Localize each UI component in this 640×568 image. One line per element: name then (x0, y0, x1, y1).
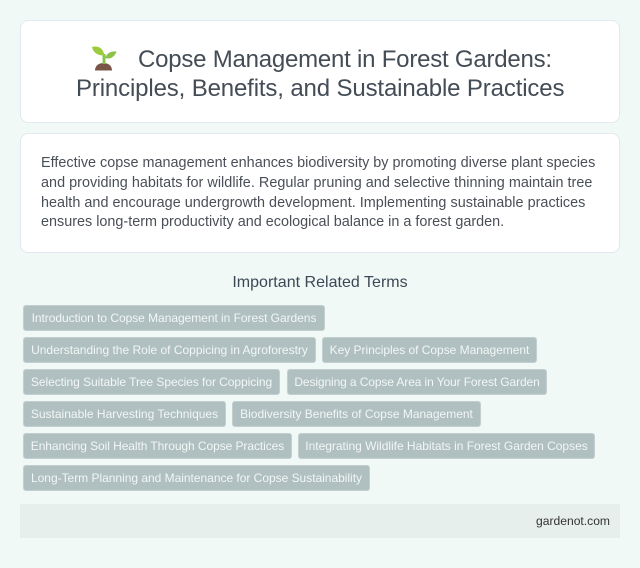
text line 2: and providing habitats for wildlife. Regular pruning and selective thinning maintain tree (41, 175, 592, 191)
tag (23, 305, 325, 331)
tag (287, 369, 547, 395)
tag: Biodiversity Benefits of Copse Management (240, 407, 473, 421)
tag: Selecting Suitable Tree Species for Coppicing (31, 375, 272, 389)
heading: related terms: Important Related Terms (232, 274, 408, 291)
tag (23, 465, 370, 491)
tag: Understanding the Role of Coppicing in Agroforestry (31, 343, 308, 357)
text line 3: health and encourage undergrowth development. Implementing sustainable practices (41, 195, 585, 211)
tag (298, 433, 595, 459)
tag: Long-Term Planning and Maintenance for Copse Sustainability (31, 471, 362, 485)
tag: Integrating Wildlife Habitats in Forest Garden Copses (305, 439, 588, 453)
icon: seedling (92, 46, 116, 70)
title line 1: Copse Management in Forest Gardens: (138, 46, 552, 73)
tag (232, 401, 481, 427)
tag: Enhancing Soil Health Through Copse Practices (31, 439, 284, 453)
tag (23, 369, 280, 395)
footer (20, 504, 620, 538)
title line 2: Principles, Benefits, and Sustainable Practices (76, 75, 564, 102)
text line 4: ensures long-term productivity and ecological balance in a forest garden. (41, 214, 504, 230)
tag: Introduction to Copse Management in Forest Gardens (32, 311, 316, 325)
tag (23, 433, 292, 459)
tag (322, 337, 537, 363)
tag (23, 401, 226, 427)
tag: Key Principles of Copse Management (330, 343, 529, 357)
tag (23, 337, 316, 363)
tag: Designing a Copse Area in Your Forest Garden (294, 375, 540, 389)
panel: intro text (20, 133, 620, 253)
text line 1: Effective copse management enhances biodiversity by promoting diverse plant species (41, 155, 595, 171)
tag group: related terms (23, 305, 595, 491)
panel: title card (20, 20, 620, 123)
footer source text: gardenot.com (536, 514, 610, 528)
tag: Sustainable Harvesting Techniques (31, 407, 218, 421)
